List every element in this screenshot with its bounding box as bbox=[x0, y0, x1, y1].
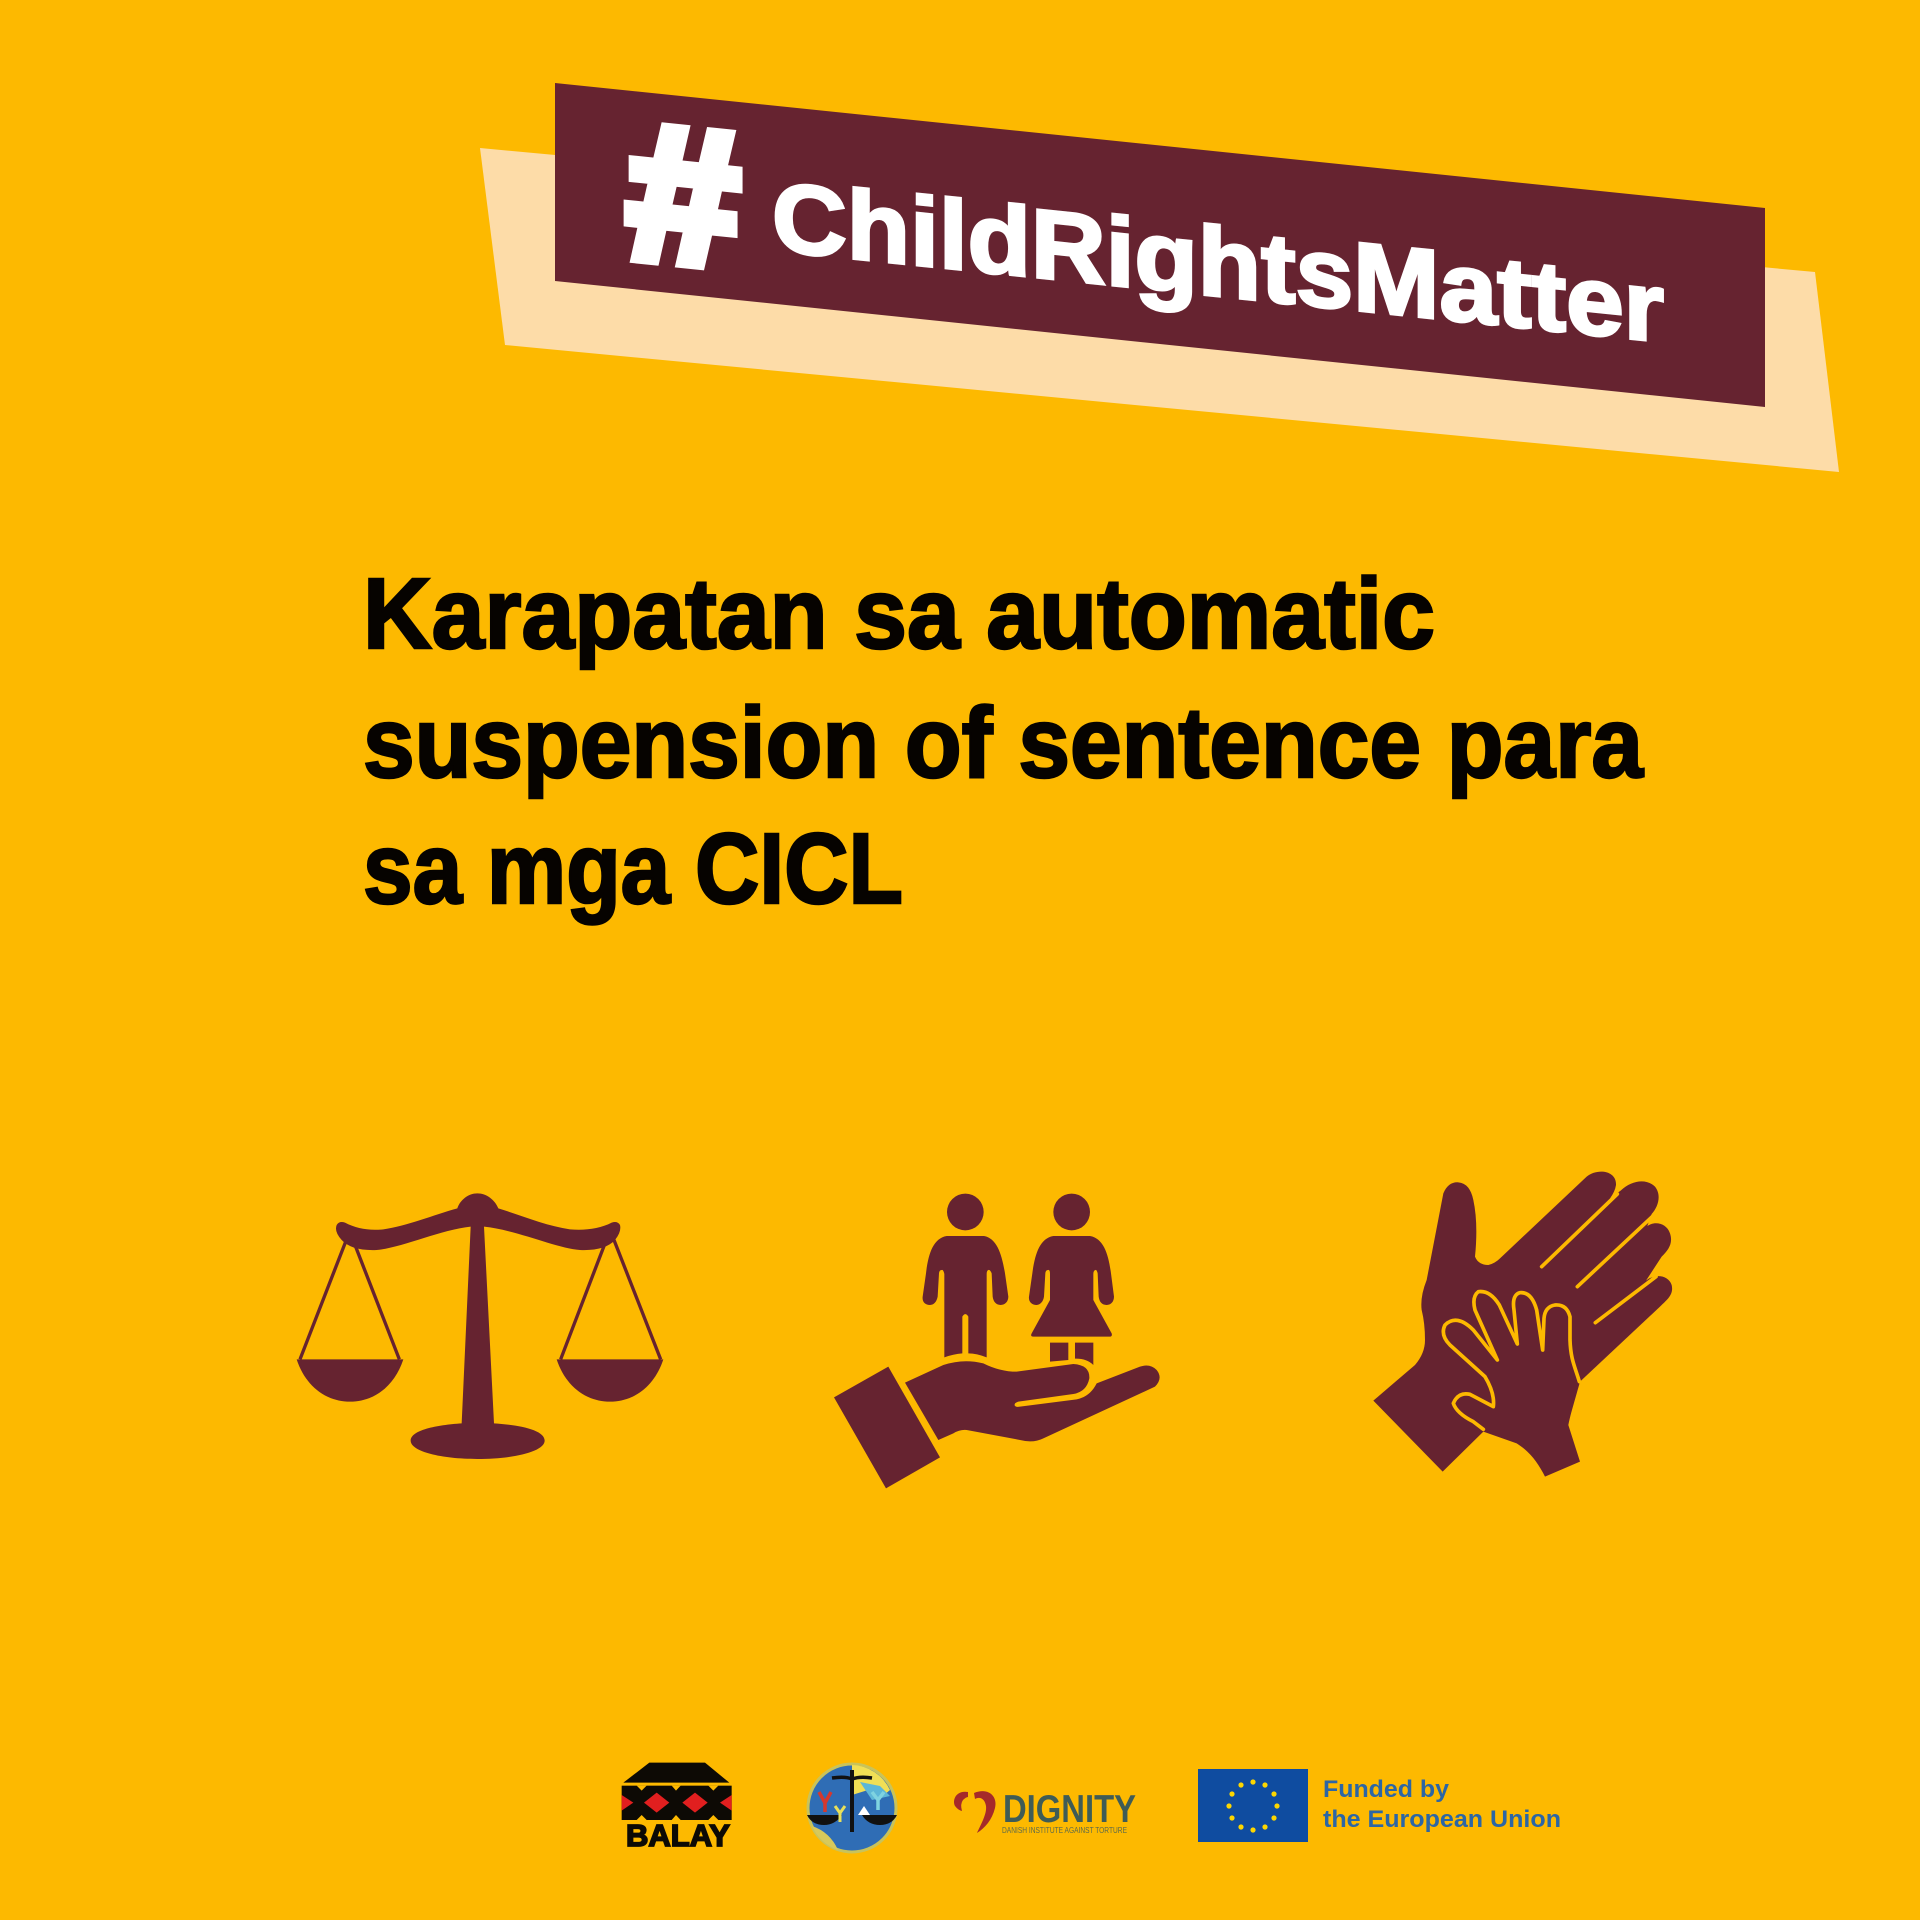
heading bbox=[363, 558, 1644, 925]
icon: hand holding two children bbox=[834, 1194, 1160, 1488]
logo: Dignity bbox=[954, 1788, 1136, 1835]
heading: Karapatan sa automatic bbox=[363, 558, 1435, 670]
adult finger separators bbox=[1542, 1194, 1656, 1323]
hash symbol: # bbox=[627, 82, 739, 308]
logo: EU flag bbox=[1198, 1769, 1308, 1842]
funding text: Funded by bbox=[1323, 1776, 1450, 1803]
icon: balance scale bbox=[297, 1193, 663, 1459]
tagline: DANISH INSTITUTE AGAINST TORTURE bbox=[1002, 1826, 1127, 1835]
icon: adult hand with child hand bbox=[1373, 1172, 1672, 1477]
logo: round justice emblem bbox=[807, 1764, 897, 1852]
wordmark: DIGNITY bbox=[1003, 1788, 1136, 1831]
funding text bbox=[1323, 1776, 1561, 1833]
logo: Balay bbox=[622, 1763, 732, 1853]
banner cream backing bbox=[480, 148, 1839, 472]
logo: Balay: BALAY bbox=[626, 1819, 730, 1853]
heading: suspension of sentence para bbox=[363, 687, 1644, 799]
banner: hashtag ribbon bbox=[480, 82, 1839, 472]
hashtag text: ChildRightsMatter bbox=[772, 161, 1664, 363]
heading: sa mga CICL bbox=[363, 813, 903, 925]
heart mark bbox=[954, 1791, 996, 1833]
banner maroon front bbox=[555, 83, 1765, 407]
funding text: the European Union bbox=[1323, 1806, 1561, 1833]
child hand outline bbox=[1443, 1291, 1579, 1429]
